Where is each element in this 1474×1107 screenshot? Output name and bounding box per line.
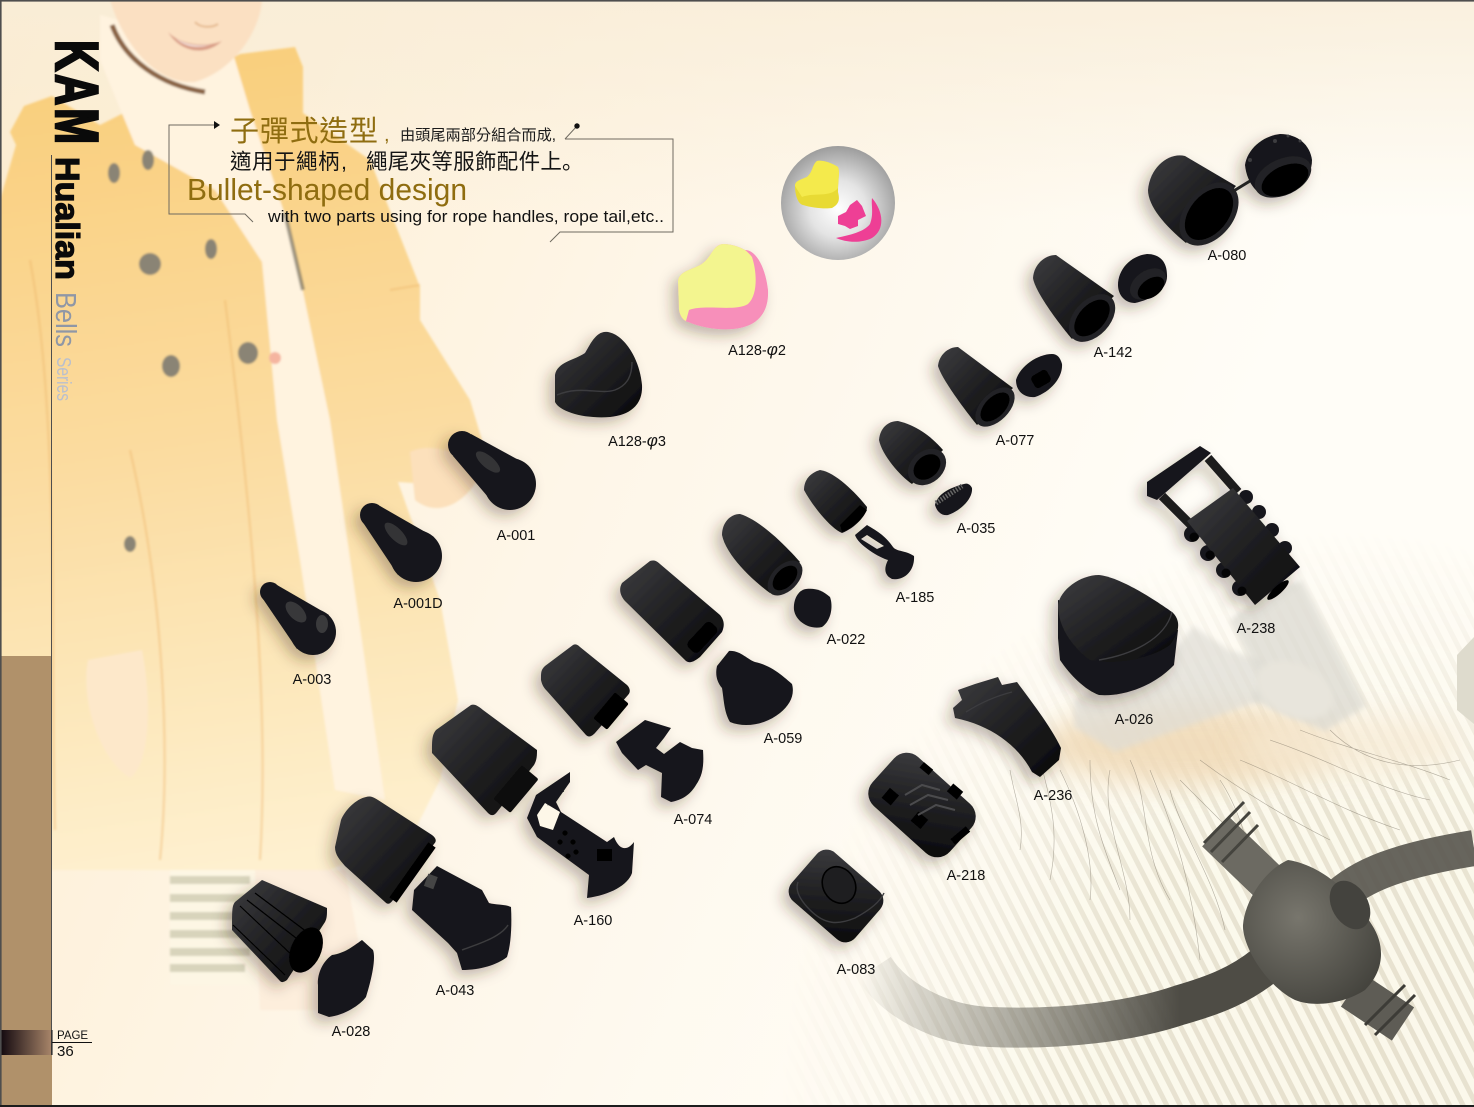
- product: A-026: A-026: [1115, 712, 1153, 728]
- chinese subheading: 由頭尾兩部分組合而成,: [400, 127, 556, 144]
- background photo: girl in yellow jacket: [0, 0, 482, 1010]
- rope upper: [1335, 848, 1474, 900]
- product: A-142: [1033, 254, 1172, 361]
- background photo: striped surface: [848, 591, 1474, 1105]
- fur hairs: [1010, 730, 1460, 960]
- scarf and inner strip: [100, 15, 385, 800]
- product: A-043: A-043: [436, 983, 474, 999]
- product: A-185: A-185: [896, 590, 934, 606]
- KAM: KAM: [43, 40, 110, 147]
- pink part: [836, 198, 881, 242]
- hand right: [410, 448, 482, 508]
- product: A-001: [448, 431, 536, 544]
- english heading: Bullet-shaped design: [187, 172, 467, 207]
- product: A128-φ2: A128-φ2: [728, 340, 786, 359]
- Series: Series: [52, 357, 74, 401]
- yellow part: [795, 161, 839, 208]
- jacket: [0, 47, 482, 870]
- background photo: rope and bead cord lock: [874, 802, 1474, 1035]
- detail ball: A128 parts: [781, 146, 895, 260]
- product: A-001D: [360, 503, 443, 612]
- product: A-035: [879, 421, 995, 537]
- PAGE label: PAGE: [57, 1030, 88, 1042]
- product: A-043: [335, 796, 511, 999]
- translucent cord lock: [1074, 626, 1262, 752]
- product: A-001D: A-001D: [393, 596, 443, 612]
- rope lower: [874, 965, 1265, 1028]
- callout frame: [169, 125, 673, 242]
- vertical brand title: [43, 40, 110, 401]
- product: A-074: A-074: [674, 812, 712, 828]
- callout: bullet-shaped design: [169, 115, 673, 242]
- page 36: 36: [57, 1043, 74, 1060]
- product: A-238: A-238: [1237, 621, 1275, 637]
- page number: [52, 1030, 92, 1060]
- product: A-236: A-236: [1034, 788, 1072, 804]
- neck shadow: [112, 25, 205, 92]
- product: A-160: [432, 705, 634, 929]
- product: A128-φ3: [555, 332, 666, 450]
- english description: with two parts using for rope handles, rope tail,etc..: [267, 208, 664, 226]
- product: A-080: [1148, 134, 1318, 264]
- product: A-001: A-001: [497, 528, 535, 544]
- fur: [1040, 705, 1340, 785]
- product: A-080: A-080: [1208, 248, 1246, 264]
- product: A-236: [953, 677, 1072, 804]
- product: A-218: [861, 746, 985, 884]
- product: A-083: [783, 844, 889, 978]
- product: A-022: [722, 514, 865, 648]
- product: A-059: [620, 560, 802, 747]
- bead upper tube: [1204, 802, 1268, 882]
- page number gradient block: [1, 1030, 52, 1055]
- product: A-028: A-028: [332, 1024, 370, 1040]
- Bells: Bells: [49, 292, 81, 347]
- hand left: [86, 650, 148, 778]
- product: A-083: A-083: [837, 962, 875, 978]
- bead body: [1243, 860, 1381, 1004]
- product: A-185: [804, 470, 934, 606]
- striped sock: [170, 870, 255, 985]
- left brown side band: [0, 656, 52, 1107]
- buttons: [108, 150, 258, 552]
- product: A128-φ3: A128-φ3: [608, 431, 666, 450]
- callout: bullet-shaped design: ,: [384, 124, 390, 146]
- background photo: translucent cord lock and fur: [1010, 581, 1474, 960]
- product: A-003: A-003: [293, 672, 331, 688]
- chinese description: ,: [341, 150, 347, 174]
- product: A-238: [1147, 446, 1300, 637]
- chinese description: 繩尾夾等服飾配件上: [366, 150, 562, 174]
- product: A-218: A-218: [947, 868, 985, 884]
- mouth: [168, 32, 222, 51]
- product: A-077: [938, 347, 1062, 449]
- product: A-035: A-035: [957, 521, 995, 537]
- chinese heading: 子彈式造型: [230, 115, 378, 148]
- product: A-028: [232, 880, 374, 1040]
- product: A-022: A-022: [827, 632, 865, 648]
- product: A-142: A-142: [1094, 345, 1132, 361]
- product: A-003: [260, 582, 336, 688]
- product: A-074: [541, 644, 712, 828]
- chinese description: 。: [562, 150, 584, 174]
- product: A-059: A-059: [764, 731, 802, 747]
- jacket folds and placket: [30, 260, 420, 860]
- pale leg: [255, 870, 360, 1010]
- product: A-160: A-160: [574, 913, 612, 929]
- bead lower tube: [1352, 985, 1415, 1035]
- product: A128-φ2: [678, 244, 786, 359]
- product: A-026: [1058, 575, 1178, 728]
- product: A-077: A-077: [996, 433, 1034, 449]
- face: [110, 0, 262, 82]
- Hualian: Hualian: [49, 157, 86, 280]
- chinese description: 適用于繩柄: [230, 150, 340, 174]
